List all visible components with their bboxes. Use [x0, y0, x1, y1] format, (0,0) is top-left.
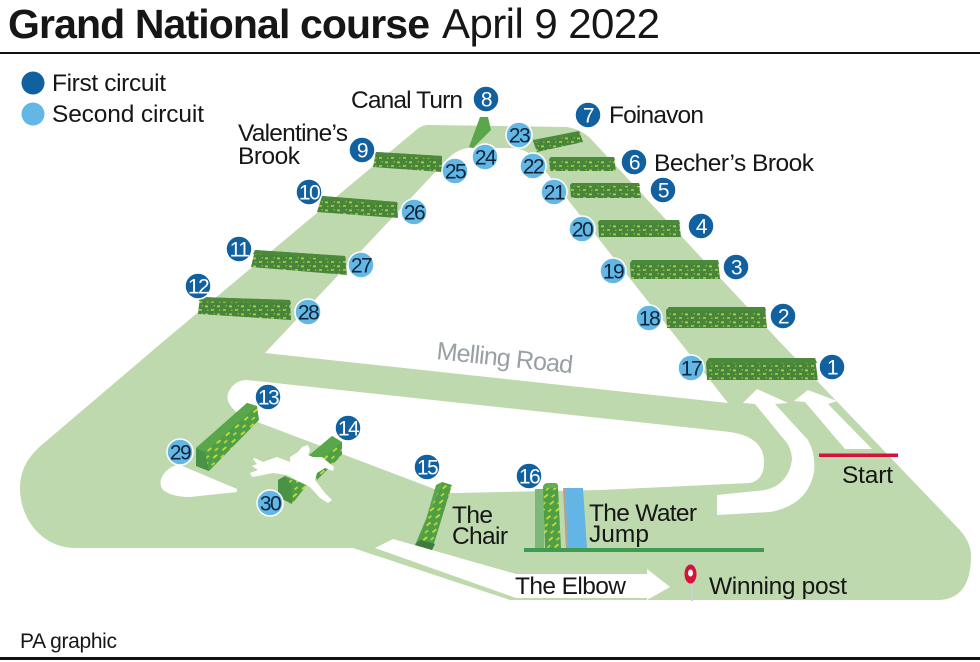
marker 4	[688, 213, 714, 239]
legend	[22, 70, 204, 128]
The Chair label: The	[452, 502, 493, 529]
Canal Turn label: Canal Turn	[351, 87, 463, 114]
marker 25	[442, 158, 468, 184]
marker 13: 13	[258, 386, 279, 410]
marker 6: 6	[629, 152, 640, 174]
inner infield	[265, 148, 728, 403]
marker 14: 14	[338, 418, 360, 440]
marker 27	[348, 252, 374, 278]
island	[160, 465, 237, 497]
marker 23	[506, 122, 532, 148]
marker 21: 21	[544, 182, 565, 204]
marker 1	[819, 354, 845, 380]
lower infield	[227, 380, 764, 493]
text: Chair	[452, 523, 508, 550]
Foinavon label: Foinavon	[609, 102, 704, 129]
marker 10: 10	[299, 182, 320, 204]
marker 29: 29	[170, 442, 191, 464]
marker 28	[295, 299, 321, 325]
hedge 12	[198, 297, 291, 320]
marker 14	[335, 415, 361, 441]
marker 30	[257, 490, 283, 516]
marker 5	[650, 177, 676, 203]
marker 7	[575, 102, 601, 128]
marker 24	[472, 144, 498, 170]
marker 27: 27	[351, 254, 372, 278]
chute arrow	[717, 389, 814, 515]
PA graphic credit: PA graphic	[20, 630, 117, 653]
marker 26: 26	[404, 202, 425, 224]
marker 20	[569, 216, 595, 242]
marker 2	[770, 303, 796, 329]
hedge shadow	[535, 489, 544, 548]
fence number markers: second circuit	[167, 122, 704, 516]
marker 15	[414, 454, 440, 480]
title: Grand National course	[8, 1, 430, 47]
text: Jump	[589, 521, 649, 548]
marker 17: 17	[681, 358, 702, 380]
marker 22: 22	[523, 156, 544, 178]
hedge 8	[469, 117, 491, 148]
marker 11: 11	[230, 238, 249, 262]
hedge 4	[598, 220, 681, 237]
winning post	[684, 560, 696, 601]
hedge 9	[373, 152, 442, 172]
hedge 13	[196, 403, 259, 471]
base line	[524, 548, 764, 552]
marker 26	[401, 199, 427, 225]
legend: second circuit: Second circuit	[52, 101, 204, 128]
Melling Road label: Melling Road	[435, 337, 575, 379]
marker 28: 28	[298, 302, 319, 324]
hedges	[196, 117, 818, 550]
marker 16: 16	[519, 466, 540, 488]
marker 21	[541, 179, 567, 205]
marker 18: 18	[639, 308, 660, 330]
marker 5: 5	[658, 180, 669, 202]
marker 12: 12	[188, 276, 209, 298]
marker 22	[520, 153, 546, 179]
marker 6	[621, 149, 647, 175]
Valentine's Brook label: Valentine’s	[238, 120, 348, 147]
The Elbow label: The Elbow	[515, 573, 626, 600]
start arrow	[794, 390, 872, 449]
Start label: Start	[842, 462, 893, 489]
marker 13	[255, 384, 281, 410]
hedge 11	[251, 250, 347, 275]
marker 30: 30	[260, 492, 281, 516]
marker 19	[600, 258, 626, 284]
legend: first circuit: First circuit	[52, 70, 166, 97]
run-in arrow	[375, 539, 670, 600]
marker 3: 3	[731, 256, 742, 280]
hedge 3	[630, 260, 720, 279]
marker 8: 8	[481, 88, 492, 112]
marker 9	[349, 137, 375, 163]
marker 18	[636, 305, 662, 331]
marker 15: 15	[417, 456, 438, 480]
hedge 16	[543, 483, 561, 548]
hedge 2	[666, 307, 767, 328]
hedge 14	[307, 436, 342, 480]
marker 12	[185, 273, 211, 299]
marker 29	[167, 439, 193, 465]
marker 7: 7	[583, 104, 594, 128]
Winning post label: Winning post	[709, 573, 847, 600]
hedge 15	[415, 482, 452, 550]
marker 19: 19	[603, 260, 624, 284]
marker 25: 25	[445, 160, 466, 184]
marker 17	[678, 355, 704, 381]
marker 4: 4	[696, 216, 708, 238]
hedge 30	[278, 476, 307, 504]
hedge 10	[317, 196, 398, 218]
marker 11	[226, 236, 252, 262]
horse and jockey	[250, 445, 334, 503]
title: April 9 2022	[442, 0, 660, 47]
header rule	[0, 52, 980, 54]
marker 16	[516, 463, 542, 489]
footer rule	[0, 657, 980, 660]
fence number markers: first circuit	[185, 86, 845, 489]
marker 8	[473, 86, 499, 112]
marker 3	[723, 254, 749, 280]
marker 2: 2	[778, 306, 789, 328]
marker 9: 9	[357, 140, 368, 162]
text: Brook	[238, 143, 301, 170]
hedge 1	[706, 358, 818, 380]
hedge 5	[570, 183, 641, 198]
water jump label: The Water	[589, 500, 697, 527]
hedge 6	[549, 157, 616, 171]
marker 10	[296, 179, 322, 205]
marker 24: 24	[475, 146, 497, 170]
marker 23: 23	[509, 124, 530, 148]
water	[565, 488, 587, 548]
Becher's Brook label: Becher’s Brook	[654, 150, 815, 177]
marker 1: 1	[827, 356, 838, 380]
marker 20: 20	[572, 218, 593, 242]
course track	[20, 125, 971, 600]
start line	[819, 454, 898, 457]
water jump	[524, 488, 764, 552]
hedge 7	[533, 131, 583, 152]
